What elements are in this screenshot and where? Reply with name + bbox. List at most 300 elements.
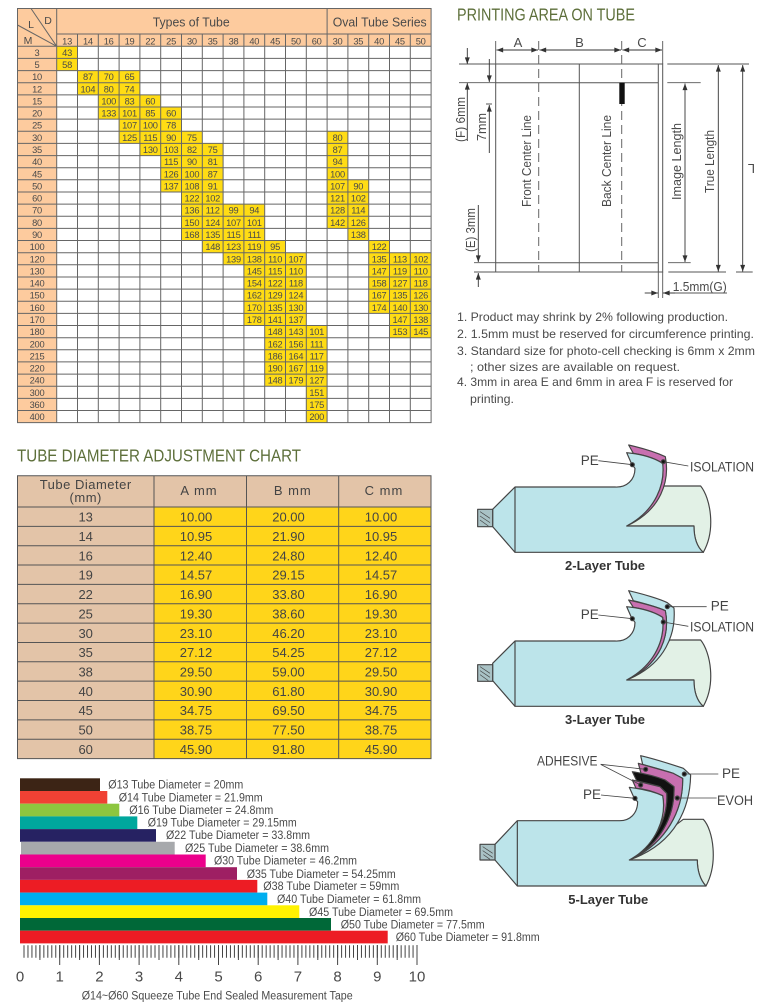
table rows: 138	[413, 315, 428, 325]
diagram: printing area	[453, 35, 755, 298]
table header band: 38	[229, 36, 238, 46]
table rows: 135	[372, 254, 387, 264]
table rows: 360	[30, 400, 44, 410]
table rows: 85	[145, 109, 155, 119]
table rows: 170	[30, 315, 44, 325]
bar labels	[108, 780, 540, 944]
illustration: 3-layer tube: PE	[711, 599, 729, 614]
table rows: 110	[289, 266, 303, 276]
ruler numbers: 7	[294, 969, 302, 986]
ruler numbers: 0	[16, 969, 24, 986]
table: tube diameter adjustment: 46.20	[272, 626, 305, 641]
table: tube diameter adjustment: 10.00	[365, 510, 397, 525]
table rows: 102	[205, 194, 220, 204]
table rows: 240	[30, 376, 44, 386]
bar labels: Ø14 Tube Diameter = 21.9mm	[119, 792, 263, 804]
bar labels: Ø38 Tube Diameter = 59mm	[263, 881, 399, 893]
bar labels: Ø25 Tube Diameter = 38.6mm	[185, 843, 329, 855]
table rows: 114	[351, 206, 365, 216]
dimension labels: (E) 3mm	[463, 208, 478, 252]
table rows: 145	[413, 327, 428, 337]
table rows: 35	[32, 145, 42, 155]
table rows: 162	[268, 339, 283, 349]
illustration: 5-layer tube	[480, 754, 753, 907]
table: tube diameter adjustment: 38.75	[180, 723, 212, 738]
table header band: 19	[125, 36, 134, 46]
table rows: 43	[62, 48, 72, 58]
table rows: 150	[30, 291, 44, 301]
table: tube diameter adjustment: 19.30	[365, 606, 397, 621]
adjustment table header: A mm	[180, 483, 218, 498]
table: tube diameter adjustment: 50	[78, 723, 93, 738]
illustration: 3-layer tube: ISOLATION	[690, 620, 754, 635]
table rows: 108	[185, 181, 199, 191]
table rows: 122	[268, 279, 283, 289]
table: tube diameter adjustment: 25	[78, 606, 93, 621]
table: tube diameter adjustment: 59.00	[272, 664, 305, 679]
table rows: 150	[185, 218, 199, 228]
table rows: 147	[372, 266, 387, 276]
notes list	[457, 310, 755, 406]
table rows: 120	[30, 254, 44, 264]
heading: printing area on tube: PRINTING AREA ON TUBE	[457, 4, 635, 24]
table: tube diameter adjustment: 10.95	[365, 529, 397, 544]
dimension labels: Back Center Line	[599, 115, 614, 207]
table rows: 87	[333, 145, 342, 155]
dimension labels: C	[637, 35, 647, 50]
table header band: 16	[104, 36, 114, 46]
table: tube diameter adjustment: 16	[78, 548, 93, 563]
table rows: 119	[247, 242, 261, 252]
table: tube diameter adjustment: 12.40	[365, 548, 397, 563]
table rows: 140	[30, 279, 44, 289]
table rows: 40	[32, 157, 42, 167]
table rows: 70	[32, 206, 42, 216]
table: tube diameter adjustment: 21.90	[272, 529, 305, 544]
table rows: 167	[289, 363, 303, 373]
table: tube diameter adjustment: 60	[78, 742, 93, 757]
table rows: 220	[30, 363, 44, 373]
ruler numbers: 9	[373, 969, 381, 986]
table rows: 83	[125, 97, 134, 107]
table rows: 90	[32, 230, 42, 240]
table header band: 35	[353, 36, 363, 46]
adjustment table header: (mm)	[70, 490, 102, 505]
table rows: 94	[333, 157, 342, 167]
table rows: 123	[226, 242, 241, 252]
table rows: 148	[205, 242, 220, 252]
table rows: 400	[30, 412, 44, 422]
table rows: 167	[372, 291, 387, 301]
table rows: 127	[309, 376, 324, 386]
ruler numbers: 4	[175, 969, 183, 986]
table: tube diameter adjustment: 29.50	[365, 664, 397, 679]
bar labels: Ø35 Tube Diameter = 54.25mm	[247, 869, 396, 881]
table rows: 95	[270, 242, 280, 252]
dimension labels: A	[514, 35, 523, 50]
table rows: 15	[32, 97, 42, 107]
bar labels: Ø13 Tube Diameter = 20mm	[108, 780, 243, 792]
table rows: 100	[185, 169, 199, 179]
table rows: 104	[81, 84, 95, 94]
dimension labels	[453, 35, 755, 294]
table rows: 110	[414, 266, 428, 276]
table rows: 119	[310, 363, 324, 373]
table rows	[30, 46, 431, 423]
bar labels: Ø19 Tube Diameter = 29.15mm	[148, 818, 297, 830]
illustration: 5-layer tube: 5-Layer Tube	[568, 892, 648, 907]
table: tube diameter adjustment: 30.90	[365, 684, 397, 699]
table rows: 160	[30, 303, 44, 313]
table: tube diameter adjustment: 38	[78, 664, 93, 679]
bar labels: Ø50 Tube Diameter = 77.5mm	[341, 920, 485, 932]
table rows: 180	[30, 327, 44, 337]
table rows: 141	[268, 315, 283, 325]
table rows: 162	[247, 291, 262, 301]
table header band: 13	[62, 36, 72, 46]
illustration: 5-layer tube: EVOH	[717, 793, 753, 808]
table header band: 22	[145, 36, 155, 46]
ruler: measurement tape	[16, 952, 425, 1002]
table rows: 101	[122, 109, 137, 119]
table header band: M	[24, 35, 32, 47]
table rows: 111	[310, 339, 323, 349]
table: tube diameter adjustment: 38.75	[365, 723, 397, 738]
table rows: 133	[101, 109, 116, 119]
notes list: 3. Standard size for photo-cell checking is 6mm x 2mm	[457, 344, 755, 358]
table rows: 87	[208, 169, 218, 179]
table rows: 102	[351, 194, 366, 204]
table rows: 91	[208, 181, 218, 191]
table rows: 99	[229, 206, 238, 216]
table: tube diameter adjustment: 45	[78, 703, 93, 718]
table rows: 81	[208, 157, 218, 167]
table rows: 110	[268, 254, 282, 264]
table rows: 107	[289, 254, 303, 264]
table: tube diameter adjustment: 19.30	[180, 606, 212, 621]
table rows: 179	[289, 376, 303, 386]
illustration: 2-layer tube	[478, 445, 754, 573]
table rows: 74	[125, 84, 134, 94]
table: tube diameter adjustment: 12.40	[180, 548, 212, 563]
table rows: 90	[187, 157, 197, 167]
table: tube diameter adjustment: 23.10	[365, 626, 397, 641]
table: tube diameter adjustment: 27.12	[365, 645, 397, 660]
dimension labels: True Length	[702, 130, 717, 193]
table rows: 80	[104, 84, 114, 94]
dimension arrows	[467, 48, 743, 293]
table header band: 14	[83, 36, 93, 46]
table rows: 124	[205, 218, 220, 228]
table: tube length by diameter	[18, 8, 431, 423]
dimension labels: Front Center Line	[519, 115, 534, 207]
illustration: 5-layer tube: ADHESIVE	[537, 754, 598, 769]
ruler numbers: 5	[214, 969, 223, 986]
table rows: 130	[289, 303, 303, 313]
dimension labels: 1.5mm(G)	[673, 279, 727, 294]
table rows: 103	[164, 145, 179, 155]
table header band: 50	[291, 36, 301, 46]
table header band	[18, 8, 431, 423]
table rows: 142	[330, 218, 345, 228]
table: tube diameter adjustment: 10.00	[180, 510, 212, 525]
table rows: 100	[330, 169, 345, 179]
adjustment table header: C mm	[365, 483, 403, 498]
table: tube diameter adjustment: 34.75	[365, 703, 397, 718]
table rows: 137	[164, 181, 179, 191]
table rows: 148	[268, 327, 283, 337]
table rows: 122	[185, 194, 199, 204]
table: tube diameter adjustment: 34.75	[180, 703, 212, 718]
table: tube diameter adjustment: 45.90	[180, 742, 212, 757]
table header band: Oval Tube Series	[333, 14, 427, 30]
table rows: 130	[413, 303, 428, 313]
table rows: 80	[333, 133, 342, 143]
dimension labels: (F) 6mm	[453, 97, 468, 142]
table rows: 151	[309, 388, 324, 398]
table: tube diameter adjustment: 30.90	[180, 684, 212, 699]
bar labels: Ø40 Tube Diameter = 61.8mm	[277, 894, 421, 906]
table rows: 80	[32, 218, 42, 228]
table rows: 115	[164, 157, 178, 167]
notes list: 2. 1.5mm must be reserved for circumference printing.	[457, 327, 754, 341]
table rows: 145	[247, 266, 262, 276]
table rows: 200	[30, 339, 44, 349]
table rows: 124	[289, 291, 303, 301]
table rows: 82	[187, 145, 197, 155]
table rows: 170	[247, 303, 262, 313]
notes list: 4. 3mm in area E and 6mm in area F is reserved for	[457, 375, 733, 389]
table rows: 75	[187, 133, 197, 143]
table rows: 60	[166, 109, 176, 119]
bars	[20, 778, 388, 943]
table rows: 130	[143, 145, 158, 155]
illustration: 5-layer tube: PE	[583, 787, 601, 802]
table: tube diameter adjustment: 35	[78, 645, 93, 660]
ruler numbers: 2	[95, 969, 104, 986]
heading: tube diameter adjustment chart: TUBE DIAMETER ADJUSTMENT CHART	[17, 446, 301, 466]
dimension labels: L	[748, 161, 755, 176]
table rows: 168	[185, 230, 199, 240]
table header band: Types of Tube	[153, 14, 230, 30]
bar labels: Ø60 Tube Diameter = 91.8mm	[396, 932, 540, 944]
table rows: 138	[247, 254, 262, 264]
table: tube diameter adjustment: 24.80	[272, 548, 305, 563]
table rows: 135	[268, 303, 283, 313]
table: tube diameter adjustment: 91.80	[272, 742, 305, 757]
table rows: 126	[351, 218, 366, 228]
table header band: L	[28, 19, 34, 31]
table rows: 300	[30, 388, 44, 398]
table rows: 143	[289, 327, 303, 337]
table: tube diameter adjustment: 22	[78, 587, 93, 602]
table rows: 126	[164, 169, 179, 179]
table rows: 126	[413, 291, 428, 301]
illustration: 2-layer tube: ISOLATION	[690, 460, 754, 475]
ruler numbers: 1	[56, 969, 64, 986]
table rows: 118	[414, 279, 428, 289]
table: tube diameter adjustment: 29.15	[272, 568, 305, 583]
table rows: 90	[353, 181, 363, 191]
table rows: 115	[226, 230, 241, 240]
table: tube diameter adjustment: 69.50	[272, 703, 305, 718]
table rows: 115	[143, 133, 157, 143]
table rows: 65	[125, 72, 134, 82]
table rows: 50	[32, 181, 42, 191]
table rows: 118	[289, 279, 303, 289]
adjustment table header: Tube Diameter	[40, 477, 132, 492]
table: tube diameter adjustment: 16.90	[180, 587, 212, 602]
table rows: 148	[268, 376, 283, 386]
table rows: 156	[289, 339, 303, 349]
table rows: 128	[330, 206, 345, 216]
illustration: 3-layer tube	[478, 591, 754, 727]
table: tube diameter adjustment	[18, 476, 431, 759]
table: tube diameter adjustment: 10.95	[180, 529, 212, 544]
table: tube diameter adjustment: 38.60	[272, 606, 305, 621]
table rows: 100	[143, 121, 158, 131]
table header band: 50	[416, 36, 426, 46]
table: tube diameter adjustment: 30	[78, 626, 93, 641]
table rows: 5	[35, 60, 40, 70]
table: tube diameter adjustment: 77.50	[272, 723, 305, 738]
table rows: 153	[393, 327, 407, 337]
table rows: 107	[122, 121, 137, 131]
table rows: 115	[268, 266, 282, 276]
table rows: 164	[289, 351, 303, 361]
table rows: 129	[268, 291, 283, 301]
table rows: 136	[185, 206, 199, 216]
table: tube diameter adjustment: 29.50	[180, 664, 212, 679]
table: tube diameter adjustment: 54.25	[272, 645, 305, 660]
table header band: D	[44, 15, 52, 27]
table rows: 178	[247, 315, 262, 325]
bar chart: tube diameter widths	[20, 778, 540, 944]
table rows: 60	[32, 194, 42, 204]
table: tube diameter adjustment: 27.12	[180, 645, 212, 660]
table header band: 60	[312, 36, 322, 46]
table rows: 138	[351, 230, 366, 240]
illustration: 2-layer tube: 2-Layer Tube	[565, 558, 645, 573]
table: tube diameter adjustment: 14	[78, 529, 93, 544]
table: tube diameter adjustment: 14.57	[365, 568, 397, 583]
dimension labels: B	[575, 35, 584, 50]
table rows: 112	[206, 206, 220, 216]
table rows: 70	[104, 72, 114, 82]
table rows: 117	[310, 351, 324, 361]
bar labels: Ø45 Tube Diameter = 69.5mm	[309, 907, 453, 919]
table rows: 101	[247, 218, 262, 228]
table rows: 10	[32, 72, 42, 82]
table rows: 186	[268, 351, 283, 361]
table rows: 200	[309, 412, 324, 422]
table rows: 60	[145, 97, 155, 107]
table header band: 40	[249, 36, 259, 46]
table: tube diameter adjustment: 13	[78, 510, 93, 525]
table: tube diameter adjustment: 40	[78, 684, 93, 699]
table rows: 158	[372, 279, 387, 289]
table rows: 94	[249, 206, 259, 216]
table: tube diameter adjustment: 33.80	[272, 587, 305, 602]
ruler numbers	[16, 969, 425, 986]
illustration: 3-layer tube: PE	[581, 607, 599, 622]
table rows: 101	[309, 327, 324, 337]
table rows: 100	[101, 97, 116, 107]
table rows: 175	[309, 400, 324, 410]
table: tube diameter adjustment: 19	[78, 568, 93, 583]
table rows: 140	[393, 303, 407, 313]
table header band: 25	[166, 36, 176, 46]
table header band: 45	[395, 36, 405, 46]
table: tube diameter adjustment: 16.90	[365, 587, 397, 602]
table rows: 121	[330, 194, 345, 204]
table header band: 45	[270, 36, 280, 46]
ruler numbers: 10	[409, 969, 425, 986]
table rows: 3	[35, 48, 40, 58]
table header band: 40	[374, 36, 384, 46]
table rows: 111	[248, 230, 261, 240]
table rows: 190	[268, 363, 283, 373]
table rows: 147	[393, 315, 407, 325]
table rows: 20	[32, 109, 42, 119]
table rows: 122	[372, 242, 387, 252]
table rows: 107	[226, 218, 241, 228]
adjustment table header	[18, 476, 431, 507]
ruler numbers: 3	[135, 969, 143, 986]
table rows: 127	[393, 279, 407, 289]
table rows: 130	[30, 266, 44, 276]
dimension labels: Image Length	[669, 123, 684, 200]
table: tube diameter adjustment: 45.90	[365, 742, 397, 757]
bar labels: Ø30 Tube Diameter = 46.2mm	[214, 856, 357, 868]
table rows: 174	[372, 303, 387, 313]
table rows: 139	[226, 254, 241, 264]
table rows: 12	[32, 84, 42, 94]
table rows: 137	[289, 315, 303, 325]
table rows: 25	[32, 121, 42, 131]
illustration: 3-layer tube: 3-Layer Tube	[565, 712, 645, 727]
table rows: 135	[205, 230, 220, 240]
table rows: 58	[62, 60, 72, 70]
table rows: 75	[208, 145, 218, 155]
table header band: 30	[187, 36, 197, 46]
table header band: 30	[333, 36, 342, 46]
table: tube diameter adjustment: 61.80	[272, 684, 305, 699]
notes list: ; other sizes are available on request.	[470, 360, 680, 374]
table rows: 87	[83, 72, 93, 82]
table: tube diameter adjustment: 23.10	[180, 626, 212, 641]
table rows: 100	[30, 242, 44, 252]
table rows: 125	[122, 133, 137, 143]
table: tube diameter adjustment: 20.00	[272, 510, 305, 525]
bar labels: Ø16 Tube Diameter = 24.8mm	[129, 805, 273, 817]
table header band: 35	[208, 36, 218, 46]
table rows: 113	[393, 254, 407, 264]
ruler caption: Ø14~Ø60 Squeeze Tube End Sealed Measurement Tape	[82, 990, 353, 1002]
ruler numbers: 6	[254, 969, 262, 986]
table rows: 107	[330, 181, 345, 191]
table rows: 154	[247, 279, 262, 289]
table rows: 90	[166, 133, 176, 143]
table rows: 135	[393, 291, 407, 301]
adjustment table header: B mm	[274, 483, 312, 498]
bar labels: Ø22 Tube Diameter = 33.8mm	[166, 830, 310, 842]
table rows: 215	[30, 351, 44, 361]
table rows: 30	[32, 133, 42, 143]
table rows: 78	[166, 121, 176, 131]
table rows: 45	[32, 169, 42, 179]
ruler numbers: 8	[333, 969, 342, 986]
